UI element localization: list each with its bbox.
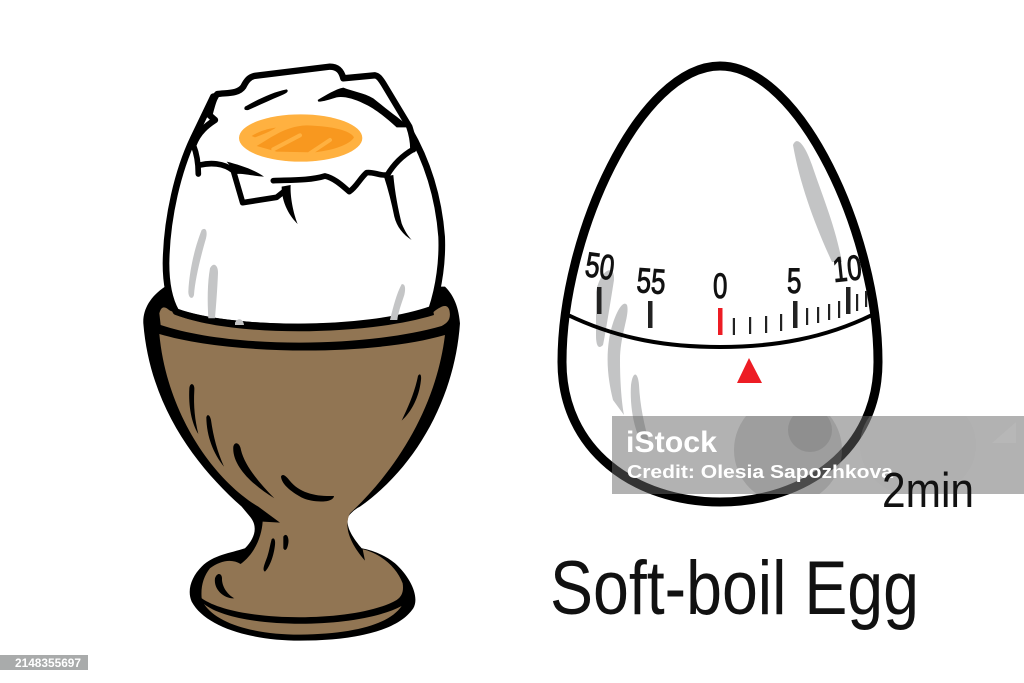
image id tag: 2148355697 [15,656,81,670]
timer dial line [568,315,872,347]
watermark credit: Credit: Olesia Sapozhkova [627,462,894,482]
heading: Soft-boil Egg [550,546,919,631]
shell cracks [193,145,413,203]
red pointer triangle [737,358,762,383]
time label: 2min [882,464,974,518]
egg body [166,83,442,327]
icon: egg cup [143,287,460,641]
crack tapers [227,88,412,240]
yolk [239,114,362,162]
watermark logo: iStock [626,426,717,459]
icon: cracked egg [166,67,442,331]
timer outline [562,66,878,502]
watermark band [612,416,1024,494]
shell top outline [193,67,413,149]
icon: egg timer [562,66,878,502]
dial numbers: 5 [787,261,801,301]
egg bottom rim cover [175,307,434,331]
dial numbers [583,244,863,306]
dial ticks [597,287,867,335]
dial numbers: 50 [583,244,617,288]
dial numbers: 10 [831,247,863,290]
cup shading strokes [189,374,421,598]
watermark blobs [734,416,872,494]
dial numbers: 0 [713,266,727,306]
timer highlights [596,141,842,445]
red zero tick [718,308,722,335]
dial numbers: 55 [635,260,667,302]
grey highlights [188,229,405,325]
